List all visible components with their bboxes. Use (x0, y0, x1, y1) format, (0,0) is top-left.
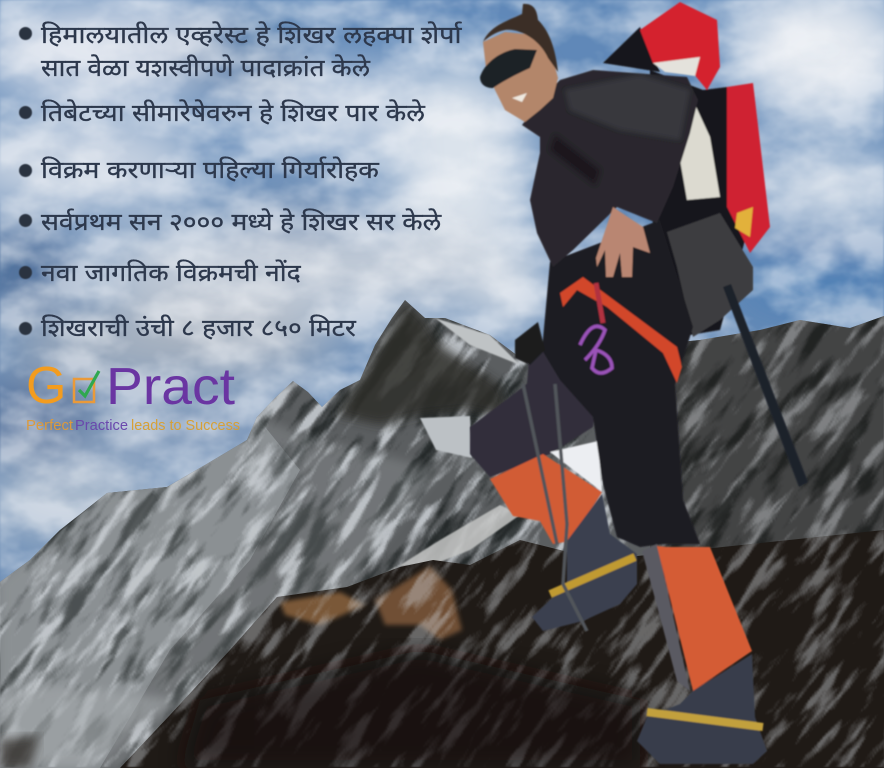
bullet 1: सात वेळा यशस्वीपणे पादाक्रांत केले (41, 55, 370, 82)
foreground ridge (120, 530, 884, 768)
sunglasses (480, 49, 537, 88)
back leg with gaiter and boot (470, 345, 637, 631)
bullet 6: शिखराची उंची ८ हजार ८५० मिटर (41, 315, 356, 342)
jacket (522, 70, 698, 267)
smile (512, 93, 527, 102)
logo letter G: G (26, 357, 66, 415)
bullet 1: हिमालयातील एव्हरेस्ट हे शिखर लहक्पा शेर्पा (41, 22, 461, 49)
bullet 5: नवा जागतिक विक्रमची नोंद (41, 260, 301, 287)
bullet 1 (18, 21, 462, 82)
bullet 3: विक्रम करणाऱ्या पहिल्या गिर्यारोहक (41, 157, 379, 184)
logo: Go Pract (26, 357, 240, 434)
mountain range (0, 300, 884, 768)
harness (560, 277, 682, 383)
sky (0, 0, 884, 600)
front leg with gaiter and boot (542, 220, 767, 764)
hand (596, 207, 650, 277)
bullet 4: सर्वप्रथम सन २००० मध्ये हे शिखर सर केले (41, 209, 441, 236)
trekking pole (723, 284, 808, 487)
backpack (603, 2, 770, 337)
logo word Pract: Pract (106, 358, 236, 416)
carabiners (580, 283, 612, 373)
climber (470, 2, 808, 764)
tagline (26, 418, 240, 434)
hair (483, 4, 558, 72)
tagline: Perfect (26, 418, 73, 434)
rope slings (523, 384, 587, 631)
bullet list (18, 21, 462, 342)
bullet 2: तिबेटच्या सीमारेषेवरुन हे शिखर पार केले (41, 100, 425, 127)
face (483, 32, 558, 122)
tagline: leads to Success (131, 418, 240, 434)
glove (515, 322, 545, 365)
checkbox icon (74, 371, 99, 402)
tagline: Practice (75, 418, 128, 434)
